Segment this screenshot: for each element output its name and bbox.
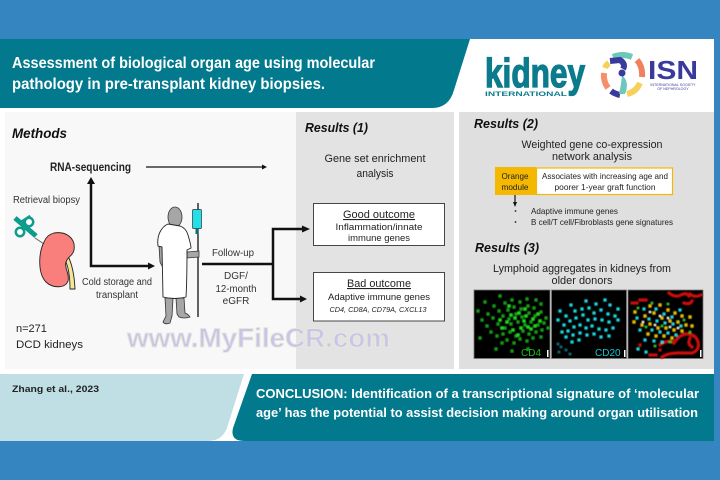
box: bad outcome: Bad outcome bbox=[347, 278, 411, 290]
icon: biopsy gun bbox=[15, 217, 44, 244]
logo: ISN: OF NEPHROLOGY bbox=[657, 87, 689, 91]
label: outcomes measured: eGFR bbox=[223, 296, 249, 307]
logo: ISN bbox=[604, 55, 698, 95]
text: gene set enrichment bbox=[324, 153, 426, 180]
box: orange module bbox=[495, 167, 536, 195]
box: bad outcome: CD4, CD8A, CD79A, CXCL13 bbox=[330, 307, 427, 314]
box: bad outcome bbox=[314, 272, 444, 321]
panel: results 1 bbox=[296, 112, 454, 369]
box: association: Associates with increasing age and bbox=[542, 171, 668, 181]
list: module genes: B cell/T cell/Fibroblasts gene signatures bbox=[531, 217, 673, 227]
label: outcomes measured bbox=[216, 271, 256, 307]
header banner bbox=[0, 39, 470, 108]
box: good outcome bbox=[314, 204, 444, 246]
label: cohort: DCD kidneys bbox=[16, 339, 84, 351]
footer: conclusion: CONCLUSION: Identification of a transcriptional signature of ‘molecular bbox=[256, 386, 699, 401]
image: CD20 staining bbox=[552, 290, 626, 359]
text: WGCNA: network analysis bbox=[552, 151, 632, 163]
label: cold storage: transplant bbox=[96, 290, 138, 301]
footer: citation: Zhang et al., 2023 bbox=[12, 384, 99, 395]
footer: citation bbox=[0, 374, 244, 441]
label: CD4: CD4 bbox=[521, 348, 541, 359]
label: cold storage bbox=[82, 277, 152, 301]
footer: conclusion bbox=[232, 374, 714, 441]
heading: results 2: Results (2) bbox=[474, 116, 538, 131]
panel: methods bbox=[5, 112, 296, 369]
box: orange module: module bbox=[502, 182, 529, 192]
label: outcomes measured: DGF/ bbox=[224, 271, 248, 282]
text: lymphoid aggregates: Lymphoid aggregates in kidneys from bbox=[493, 263, 671, 275]
logo: ISN: ISN bbox=[648, 55, 698, 85]
label: follow-up: Follow-up bbox=[212, 248, 254, 259]
label: CD20: CD20 bbox=[595, 348, 621, 359]
box: bad outcome: Adaptive immune genes bbox=[328, 292, 431, 302]
title: pathology in pre-transplant kidney biopsies. bbox=[12, 76, 325, 93]
title bbox=[12, 55, 375, 93]
label: RNA-sequencing: RNA-sequencing bbox=[50, 162, 131, 174]
text: lymphoid aggregates bbox=[493, 263, 671, 287]
logo: ISN: INTERNATIONAL SOCIETY bbox=[650, 83, 696, 87]
label: cohort bbox=[16, 323, 84, 351]
label: cold storage: Cold storage and bbox=[82, 277, 152, 288]
box: good outcome: Inflammation/innate bbox=[336, 222, 422, 232]
box: association bbox=[536, 168, 672, 194]
image: merged staining bbox=[628, 290, 703, 358]
box: good outcome: immune genes bbox=[348, 233, 411, 243]
label: retrieval biopsy: Retrieval biopsy bbox=[13, 195, 80, 206]
title: Assessment of biological organ age using molecular bbox=[12, 55, 375, 72]
watermark: www.MyFileCR.com bbox=[126, 323, 390, 353]
text: gene set enrichment: Gene set enrichment bbox=[324, 153, 426, 165]
arrow: sequencing to results bbox=[146, 164, 267, 170]
text: gene set enrichment: analysis bbox=[356, 168, 394, 180]
heading: results 1: Results (1) bbox=[305, 120, 368, 135]
label: cohort: n=271 bbox=[16, 323, 47, 335]
list: module genes bbox=[515, 206, 673, 227]
box: good outcome: Good outcome bbox=[343, 209, 415, 221]
panel: results 2 and 3 bbox=[459, 112, 714, 369]
logo: kidney international: kidney bbox=[485, 50, 585, 96]
text: WGCNA bbox=[522, 139, 662, 163]
arrow: transplant and sequencing bbox=[87, 177, 155, 270]
icon: patient with IV drip bbox=[158, 203, 202, 324]
heading: methods: Methods bbox=[12, 126, 67, 141]
text: WGCNA: Weighted gene co-expression bbox=[522, 139, 662, 151]
list: module genes: Adaptive immune genes bbox=[531, 206, 618, 216]
arrow: orange module down bbox=[513, 195, 517, 207]
heading: results 3: Results (3) bbox=[475, 240, 539, 255]
image: CD4 staining bbox=[474, 290, 550, 359]
box: association: poorer 1-year graft function bbox=[554, 182, 656, 192]
icon: kidney bbox=[40, 233, 75, 289]
box: orange module: Orange bbox=[502, 171, 529, 181]
footer: conclusion: age’ has the potential to assist decision making around organ utilisation bbox=[256, 405, 698, 420]
label: outcomes measured: 12-month bbox=[216, 284, 256, 295]
logo: kidney international: INTERNATIONAL bbox=[485, 91, 567, 98]
arrow: follow-up branch bbox=[202, 226, 310, 302]
text: lymphoid aggregates: older donors bbox=[552, 275, 613, 287]
